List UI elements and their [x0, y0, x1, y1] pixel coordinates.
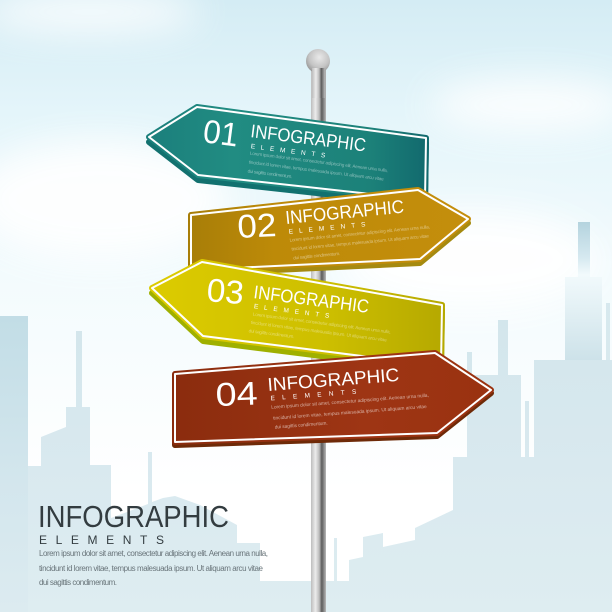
- number 01: 01: [201, 112, 241, 154]
- sign 02 heading: INFOGRAPHIC: [284, 196, 405, 228]
- number 02: 02: [236, 206, 277, 245]
- sign 03 heading: tincidunt id lorem vitae, tempus malesuada ipsum. Ut aliquam arcu vitae: [251, 320, 387, 343]
- description text: Lorem ipsum dolor sit amet, consectetur adipiscing elit. Aenean urna nulla,: [39, 549, 268, 558]
- sign 03 heading: dui sagittis condimentum.: [248, 328, 295, 339]
- sign 01 heading: ELEMENTS: [250, 143, 326, 160]
- sign 01 heading: INFOGRAPHIC: [249, 120, 367, 156]
- sign 03 yellow left arrow: [152, 262, 442, 371]
- description text: [39, 549, 268, 587]
- sign 03 heading: ELEMENTS: [253, 303, 330, 320]
- sign 01 teal left arrow: [149, 107, 426, 205]
- sign 01 heading: [245, 120, 392, 191]
- sign 04 heading: INFOGRAPHIC: [267, 364, 400, 395]
- sign 02 heading: Lorem ipsum dolor sit amet, consectetur adipiscing elit. Aenean urna nulla,: [289, 224, 430, 243]
- sign 04 heading: [267, 362, 431, 431]
- sign 02 heading: ELEMENTS: [288, 221, 366, 236]
- sign 03 heading: INFOGRAPHIC: [252, 281, 370, 317]
- main title: INFOGRAPHIC: [38, 499, 229, 534]
- bottom-left title block: [38, 499, 268, 587]
- sign 01 heading: dui sagittis condimentum.: [247, 169, 293, 179]
- sign 02 amber right arrow: [191, 190, 468, 274]
- sign 02 heading: tincidunt id lorem vitae, tempus malesuada ipsum. Ut aliquam arcu vitae: [291, 233, 429, 252]
- sign 04 heading: dui sagittis condimentum.: [275, 421, 328, 431]
- number 04: 04: [215, 375, 258, 413]
- sign 04 heading: tincidunt id lorem vitae, tempus malesuada ipsum. Ut aliquam arcu vitae: [273, 404, 427, 422]
- sign 04 heading: Lorem ipsum dolor sit amet, consectetur adipiscing elit. Aenean urna nulla,: [271, 393, 429, 411]
- sign 03 heading: Lorem ipsum dolor sit amet, consectetur adipiscing elit. Aenean urna nulla,: [253, 312, 391, 335]
- sign 04 heading: ELEMENTS: [270, 389, 357, 402]
- sign 01 heading: Lorem ipsum dolor sit amet, consectetur adipiscing elit. Aenean urna nulla,: [250, 151, 388, 173]
- subtitle: ELEMENTS: [39, 533, 164, 547]
- sign 04 rust right arrow: [175, 353, 491, 445]
- pole ball cap: [306, 49, 330, 73]
- sign 02 heading: [284, 193, 432, 261]
- number 03: 03: [205, 271, 245, 311]
- description text: tincidunt id lorem vitae, tempus malesuada ipsum. Ut aliquam arcu vitae: [39, 564, 264, 573]
- sign 01 heading: tincidunt id lorem vitae, tempus malesuada ipsum. Ut aliquam arcu vitae: [249, 160, 385, 182]
- signpost pole: [306, 49, 330, 612]
- sign 03 heading: [248, 281, 395, 351]
- sign 02 heading: dui sagittis condimentum.: [293, 251, 340, 260]
- description text: dui sagittis condimentum.: [39, 578, 117, 587]
- city skyline silhouette: [0, 222, 612, 612]
